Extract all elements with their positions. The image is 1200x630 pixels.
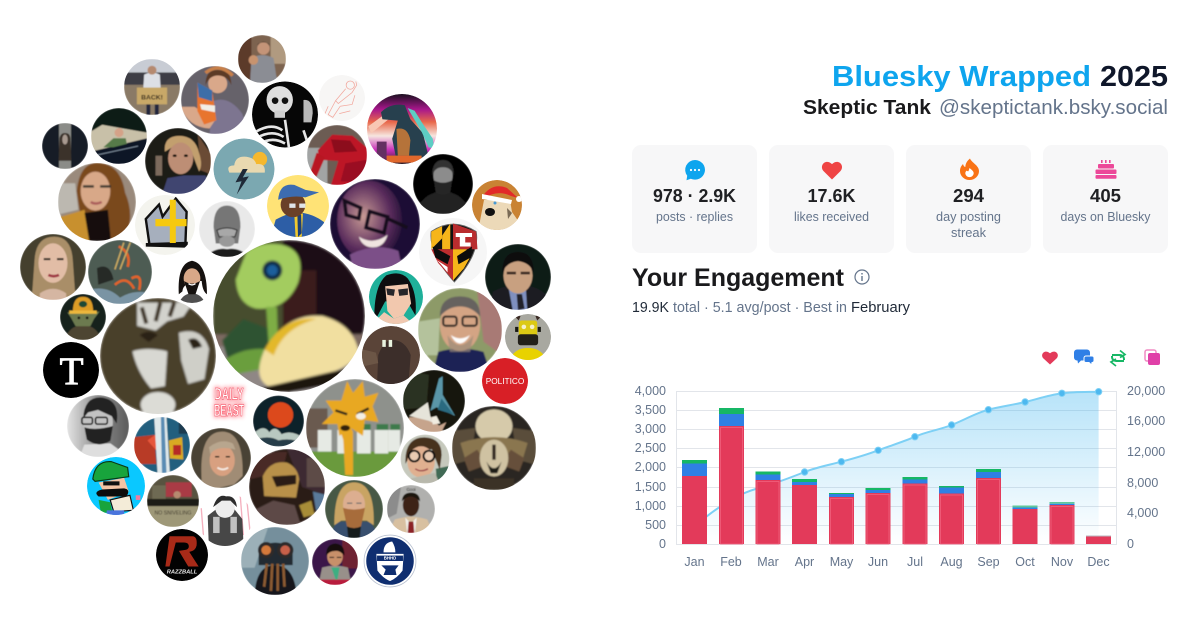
avatar bubble cluster <box>20 35 551 595</box>
avatar: yellow mascot on football pitch <box>306 379 404 477</box>
avatar: Daily Beast logo: DAILY <box>214 386 244 404</box>
avatar: cartoon man in blue cap <box>267 175 329 237</box>
avatar: Daily Beast logo <box>214 386 244 420</box>
month labels: May <box>830 555 854 569</box>
avatar: cartoon Kuzco with sunglasses <box>369 270 423 324</box>
icon: quotes copy squares <box>1145 350 1160 365</box>
icon: birthday cake <box>1096 160 1116 179</box>
avatar: protester with sign <box>124 59 180 115</box>
panel: days on Bluesky: days on Bluesky <box>1060 209 1151 224</box>
avatar: New York Times T logo <box>43 342 99 398</box>
avatar: navy anvil shield logo: BHHD <box>384 556 396 561</box>
avatar: origami crane held in hand <box>403 370 465 432</box>
avatar: pale balding man in shadow <box>145 128 211 194</box>
avatar: No Sniveling room scene <box>147 475 199 527</box>
month labels: Jan <box>684 555 705 569</box>
avatar: anime figure with pink stripes <box>198 492 252 546</box>
icon: replies bubbles <box>1074 350 1094 365</box>
avatar: dark portrait man <box>413 154 473 214</box>
title: Bluesky Wrapped 2025: Bluesky Wrapped <box>832 61 1091 93</box>
right axis labels <box>1127 384 1165 551</box>
icon: likes heart <box>1042 352 1058 364</box>
cumulative points <box>801 388 1102 475</box>
icon: flame <box>960 158 979 180</box>
bar: Apr <box>792 479 817 544</box>
icon: info <box>855 270 869 284</box>
right axis labels: 12,000 <box>1127 445 1165 459</box>
avatar: Daily Beast logo: BEAST <box>214 402 244 420</box>
month labels: Jun <box>868 555 888 569</box>
right axis labels: 0 <box>1127 537 1134 551</box>
icon: heart <box>822 162 842 180</box>
avatar: protester with sign: BACK! <box>141 94 163 101</box>
avatar: long-haired bearded man <box>325 480 383 538</box>
panel: day posting streak: day posting <box>936 209 1001 224</box>
left axis labels: 4,000 <box>635 384 666 398</box>
avatar: woman in car <box>91 108 147 164</box>
cumulative line <box>694 392 1099 527</box>
icon: reposts arrows <box>1111 350 1125 366</box>
subtitle: user name and handle: Skeptic Tank <box>803 97 932 119</box>
icon: chat bubble <box>685 160 705 180</box>
avatar: Daft Punk helmet figure <box>249 449 325 525</box>
chart: monthly engagement bars and cumulative line <box>635 384 1165 569</box>
avatar: ornate skull <box>452 406 536 490</box>
avatar: navy anvil shield logo <box>363 534 417 588</box>
avatar: woman with chip bag <box>181 66 249 134</box>
left axis labels: 1,000 <box>635 499 666 513</box>
right axis labels: 8,000 <box>1127 476 1158 490</box>
panel: likes received: likes received <box>794 209 869 224</box>
avatar: bishop mitre <box>135 195 195 255</box>
left axis labels: 2,000 <box>635 460 666 474</box>
avatar: man in tan suit with tie: Gooi <box>406 487 416 492</box>
avatar: tree-shaped faces engraving <box>100 298 216 417</box>
panel: posts and replies: 978 · 2.9K <box>653 186 736 206</box>
avatar: cartoon dog in Santa hat <box>472 180 522 230</box>
right axis labels: 20,000 <box>1127 384 1165 398</box>
avatar: red dragon <box>307 125 367 185</box>
bar: Jul <box>902 477 928 544</box>
panel: posts and replies: posts · replies <box>656 209 733 224</box>
avatar: smiling man with glasses and navy shirt <box>418 288 502 372</box>
bar: Feb <box>719 408 744 544</box>
avatar: Maryland flag alien <box>419 218 487 286</box>
left axis labels: 3,000 <box>635 422 666 436</box>
engagement summary line: February <box>851 300 911 316</box>
month labels: Dec <box>1087 555 1110 569</box>
avatar: Razzball logo: RAZZBALL <box>167 570 198 576</box>
avatar: colourful abstract painting <box>134 417 190 473</box>
bar: Dec <box>1086 536 1111 544</box>
avatar: man at conference with lanyard <box>312 539 358 585</box>
panel: posts and replies <box>632 145 757 253</box>
month labels: Nov <box>1051 555 1074 569</box>
avatar: bearded long-hair cartoon <box>178 260 207 303</box>
left axis labels: 3,500 <box>635 403 666 417</box>
bar: Mar <box>756 472 780 544</box>
engagement summary line <box>632 300 911 316</box>
month labels: Sep <box>977 555 1000 569</box>
panel: likes received <box>769 145 894 253</box>
avatar: orange moon over wave <box>253 396 304 446</box>
bar: Oct <box>1012 506 1038 544</box>
avatar: woman with grey-blonde hair <box>191 428 251 488</box>
bar: Sep <box>976 469 1001 544</box>
avatar: No Sniveling room scene: NO SNIVELING <box>155 511 191 517</box>
month labels: Apr <box>795 555 814 569</box>
left axis labels: 0 <box>659 537 666 551</box>
month labels: Feb <box>720 555 742 569</box>
month labels: Oct <box>1015 555 1035 569</box>
panel: day posting streak: 294 <box>953 186 984 206</box>
avatar: masked helmet man <box>199 201 255 257</box>
avatar: Politico logo: POLITICO <box>486 377 524 386</box>
right axis labels: 4,000 <box>1127 506 1158 520</box>
avatar: man holding baby <box>238 35 286 83</box>
left axis labels: 1,500 <box>635 480 666 494</box>
avatar: green alien with taco <box>213 240 365 392</box>
avatar: smiling man with glasses, purple tint <box>330 179 420 269</box>
grid lines <box>676 391 1117 544</box>
month labels: Jul <box>907 555 923 569</box>
avatar: Daily Beast logo: BEAST <box>214 402 244 420</box>
avatar: Yoda in Packers cap <box>60 294 106 340</box>
avatar: pixel Godzilla <box>367 94 437 164</box>
left axis labels: 500 <box>645 518 666 532</box>
bar: Jun <box>866 488 890 544</box>
avatar: woman with long hair <box>20 234 86 300</box>
subtitle: user name and handle: @skeptictank.bsky.social <box>939 97 1168 119</box>
avatar: heavy-set man in suit <box>485 244 551 310</box>
cumulative area <box>694 392 1099 544</box>
title: Bluesky Wrapped 2025: 2025 <box>1100 61 1168 93</box>
left axis labels: 2,500 <box>635 441 666 455</box>
avatar: black and white bearded man <box>67 395 129 457</box>
heading: Your Engagement: Your Engagement <box>632 264 845 292</box>
avatar: Razzball logo <box>156 529 208 581</box>
chart legend icons <box>1042 350 1160 366</box>
bar: Jan <box>682 460 707 544</box>
avatar: Japanese dragon print <box>88 240 152 304</box>
avatar: man in tan suit with tie <box>387 485 435 533</box>
subtitle: user name and handle <box>803 97 1168 119</box>
panel: day posting streak <box>906 145 1031 253</box>
avatar: red-haired woman with glasses <box>58 163 136 241</box>
month labels: Mar <box>757 555 779 569</box>
avatar: dark brown creature <box>362 326 420 384</box>
avatar: yellow horned orc <box>505 314 551 360</box>
bar: Aug <box>939 486 964 544</box>
panel: likes received: 17.6K <box>808 186 856 206</box>
avatar: pale sketch drawing <box>319 75 365 121</box>
avatar: Politico logo <box>482 358 528 404</box>
panel: days on Bluesky: 405 <box>1090 186 1121 206</box>
avatar: Daily Beast logo: DAILY <box>214 386 244 404</box>
avatar: narrow strip portrait <box>42 123 88 169</box>
left axis labels <box>635 384 666 551</box>
bar: Nov <box>1050 502 1074 544</box>
right axis labels: 16,000 <box>1127 414 1165 428</box>
avatar: skeleton <box>252 82 318 148</box>
avatar: woman with round black glasses <box>400 434 450 484</box>
avatar: New York Times T logo: T <box>60 350 84 393</box>
avatar: weather storm cloud <box>214 138 274 200</box>
panel: days on Bluesky <box>1043 145 1168 253</box>
avatar: pixel Luigi <box>87 457 145 515</box>
engagement summary line: 19.9K <box>632 300 669 316</box>
avatar: goggled creature with dreadlocks <box>241 527 309 595</box>
panel: day posting streak: streak <box>951 225 986 240</box>
engagement summary line: total · 5.1 avg/post · Best in <box>673 300 847 316</box>
month labels <box>684 555 1110 569</box>
month labels: Aug <box>940 555 963 569</box>
stacked bars <box>682 408 1111 544</box>
bar: May <box>829 493 854 544</box>
